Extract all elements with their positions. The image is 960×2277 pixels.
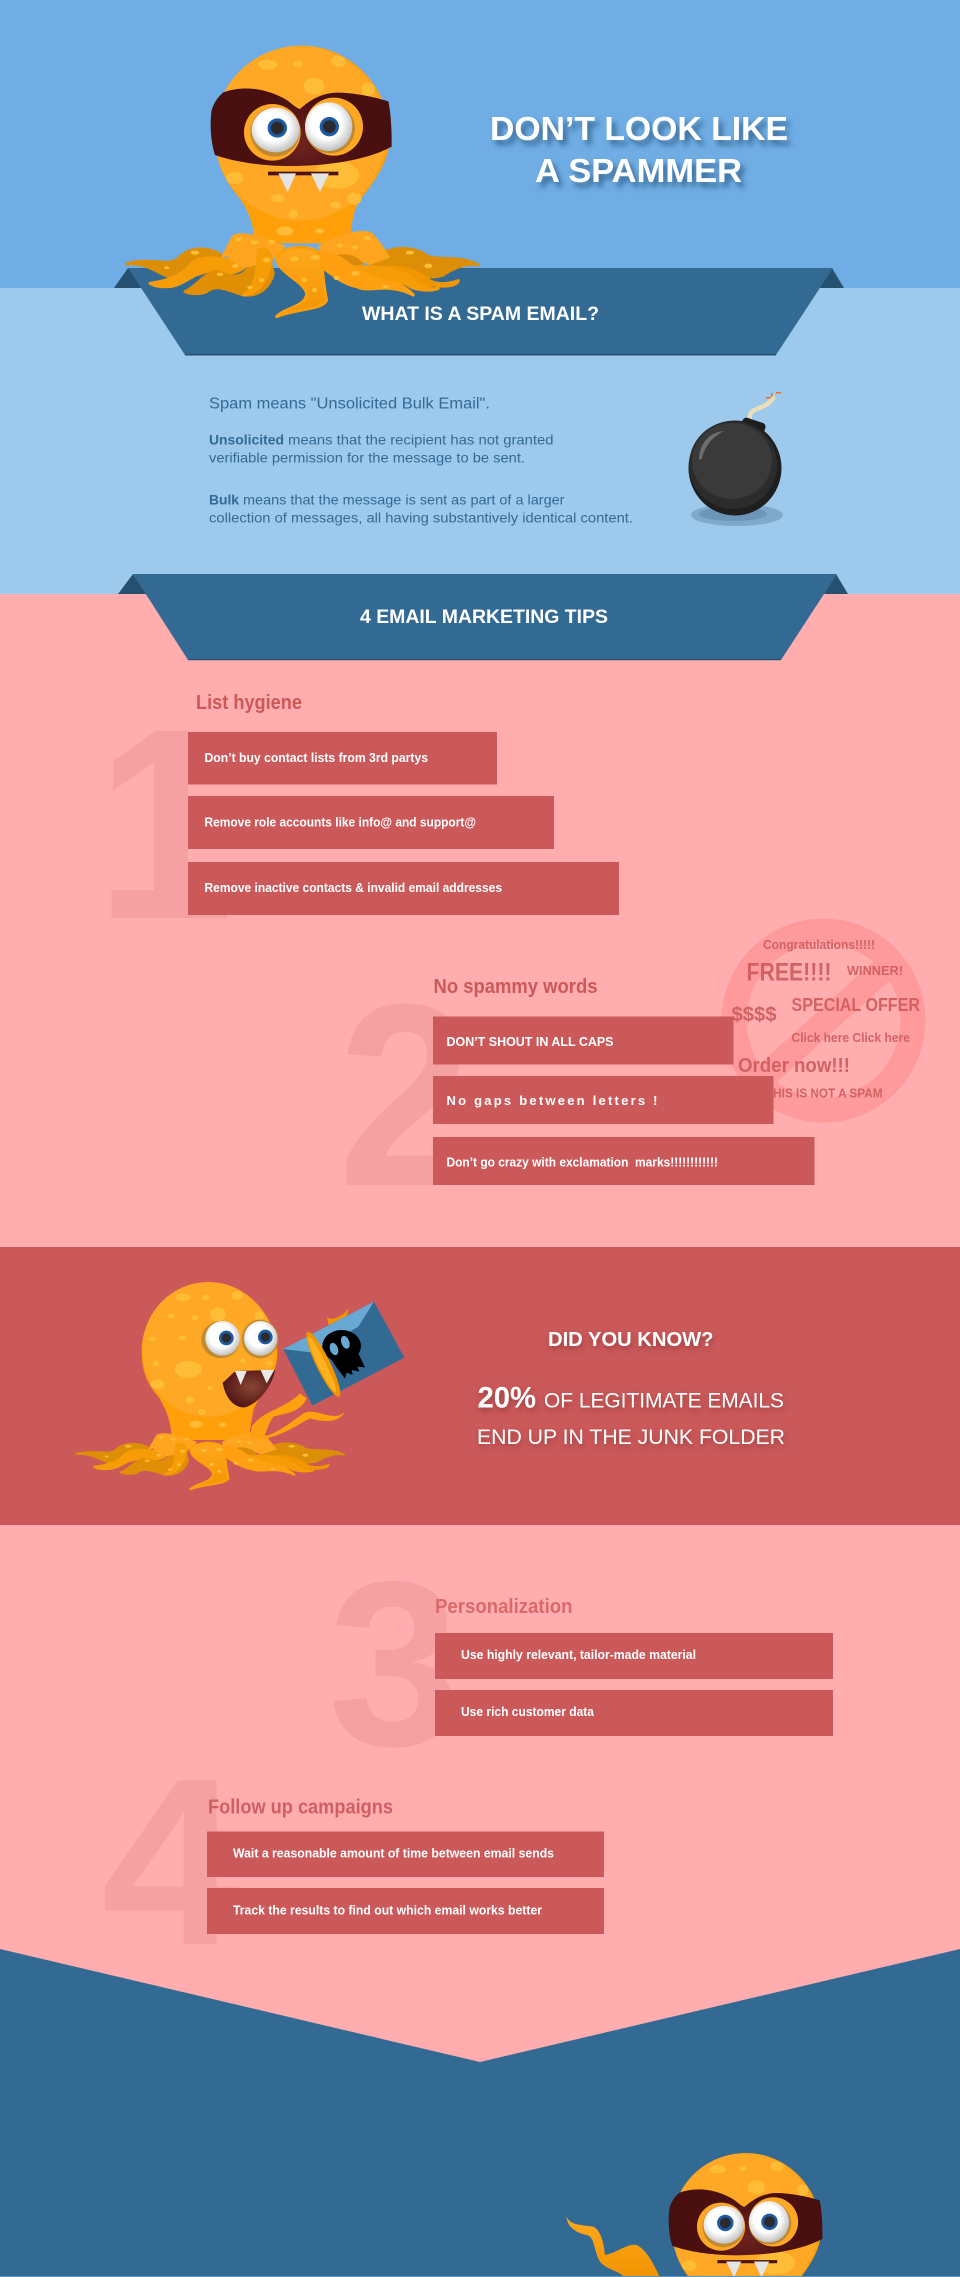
tip 4: follow up campaigns [101, 1730, 604, 1995]
ribbon: what is a spam email: WHAT IS A SPAM EMAIL? [362, 303, 599, 325]
tip 1: list hygiene [96, 672, 619, 976]
ribbon: 4 email marketing tips: 4 EMAIL MARKETING TIPS [360, 606, 608, 628]
did you know text: DID YOU KNOW? [548, 1329, 714, 1351]
did you know text [477, 1329, 785, 1449]
octopus tentacle tail [567, 2217, 659, 2276]
numeral 1: 1 [96, 672, 234, 976]
tips section background [0, 594, 960, 2077]
intro section background [0, 288, 960, 594]
intro text block: means that the recipient has not granted [288, 432, 554, 448]
tip 4: follow up campaigns: Follow up campaigns [208, 1796, 393, 1818]
title: A SPAMMER [535, 152, 742, 189]
spam word cloud with prohibition sign: WINNER! [847, 963, 903, 978]
octopus mascot: footer peeking [567, 2153, 822, 2277]
octopus mascot: masked [127, 46, 478, 317]
spam word cloud with prohibition sign: Order now!!! [738, 1055, 850, 1077]
did you know text: OF LEGITIMATE EMAILS [544, 1388, 784, 1412]
tip 2: no spammy words: Don’t go crazy with exclamation marks!!!!!!!!!!!! [446, 1154, 718, 1170]
footer blue background [0, 1949, 960, 2277]
numeral 3: 3 [328, 1532, 460, 1795]
tip 2: no spammy words [338, 951, 814, 1241]
header background [0, 0, 960, 288]
tip 1: list hygiene: List hygiene [196, 692, 302, 714]
intro text block [209, 396, 633, 526]
spam word cloud with prohibition sign: THIS IS NOT A SPAM [766, 1086, 882, 1100]
ribbon: 4 email marketing tips [118, 574, 848, 660]
intro text block: Bulk [209, 492, 239, 508]
intro text block: Unsolicited [209, 432, 284, 448]
intro text block: means that the message is sent as part of a larger [243, 492, 565, 508]
tip 2: no spammy words: No gaps between letters ! [446, 1093, 658, 1108]
spam word cloud with prohibition sign: $$$$ [732, 1004, 776, 1026]
tip 2: no spammy words: No spammy words [434, 976, 598, 998]
tip 1: list hygiene: Don’t buy contact lists from 3rd partys [204, 750, 428, 765]
spam word cloud with prohibition sign: Click here Click here [792, 1030, 910, 1045]
tip 3: personalization [328, 1532, 833, 1795]
intro text block: collection of messages, all having substantively identical content. [209, 510, 633, 526]
did you know text: 20% [478, 1382, 536, 1414]
tip 1: list hygiene: Remove role accounts like info@ and support@ [204, 814, 476, 830]
tip 4: follow up campaigns: Wait a reasonable amount of time between email sends [233, 1846, 554, 1860]
spam word cloud with prohibition sign: SPECIAL OFFER [792, 995, 920, 1015]
title [490, 110, 788, 189]
spam word cloud with prohibition sign [732, 931, 920, 1110]
octopus mascot: holding spam envelope [76, 1282, 404, 1489]
tip 1: list hygiene: Remove inactive contacts & invalid email addresses [204, 880, 502, 895]
title: DON’T LOOK LIKE [490, 110, 788, 147]
spam word cloud with prohibition sign: FREE!!!! [746, 958, 832, 986]
octopus head [669, 2153, 822, 2277]
intro text block: Spam means "Unsolicited Bulk Email". [209, 396, 490, 412]
panel: did you know band [0, 1247, 960, 1525]
numeral 4: 4 [101, 1730, 241, 1995]
ribbon: what is a spam email [114, 268, 844, 356]
tip 4: follow up campaigns: Track the results to find out which email works better [233, 1902, 542, 1918]
spam word cloud with prohibition sign: Congratulations!!!!! [763, 937, 875, 952]
tip 2: no spammy words: DON’T SHOUT IN ALL CAPS [446, 1034, 614, 1049]
tip 3: personalization: Use highly relevant, tailor-made material [461, 1647, 696, 1662]
tip 3: personalization: Personalization [435, 1596, 572, 1618]
did you know text: END UP IN THE JUNK FOLDER [477, 1425, 785, 1449]
intro text block: verifiable permission for the message to be sent. [209, 450, 525, 466]
tip 3: personalization: Use rich customer data [461, 1704, 595, 1719]
icon: bomb [688, 392, 783, 526]
numeral 2: 2 [338, 951, 473, 1241]
